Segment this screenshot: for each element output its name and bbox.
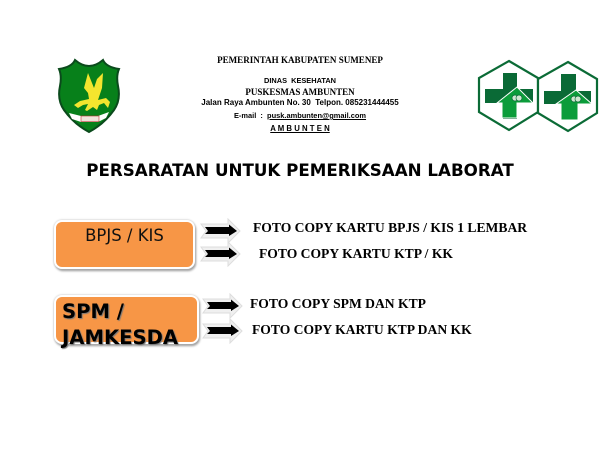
address: Jalan Raya Ambunten No. 30 Telpon. 085231444455 xyxy=(201,98,399,107)
panel: SPM / JAMKESDA xyxy=(54,295,199,344)
arrow: SPM requirement 1 xyxy=(202,293,242,318)
heading: government name: PEMERINTAH KABUPATEN SUMENEP xyxy=(217,55,383,65)
requirement text: BPJS card copy: FOTO COPY KARTU BPJS / KIS 1 LEMBAR xyxy=(253,220,527,235)
requirement text: KTP / KK copy: FOTO COPY KARTU KTP / KK xyxy=(259,246,453,261)
arrow: BPJS requirement 1 xyxy=(200,218,240,242)
logo: regency shield xyxy=(58,58,120,134)
panel label: BPJS / KIS xyxy=(85,226,164,245)
requirement text: SPM and KTP copy: FOTO COPY SPM DAN KTP xyxy=(250,296,426,311)
town name: A M B U N T E N xyxy=(270,124,330,133)
arrow: SPM requirement 2 xyxy=(202,318,242,344)
panel label: SPM / JAMKESDA xyxy=(62,300,178,349)
clinic name: PUSKESMAS AMBUNTEN xyxy=(245,87,355,97)
arrow: BPJS requirement 2 xyxy=(200,242,240,267)
logo: puskesmas hexagons xyxy=(478,60,598,132)
requirement text: KTP and KK copy: FOTO COPY KARTU KTP DAN KK xyxy=(252,322,472,337)
department name: DINAS KESEHATAN xyxy=(264,76,336,85)
title: PERSARATAN UNTUK PEMERIKSAAN LABORAT xyxy=(86,160,514,180)
letterhead text block xyxy=(201,55,399,133)
email: E-mail : pusk.ambunten@gmail.com xyxy=(234,111,366,120)
panel: BPJS / KIS xyxy=(54,220,195,269)
